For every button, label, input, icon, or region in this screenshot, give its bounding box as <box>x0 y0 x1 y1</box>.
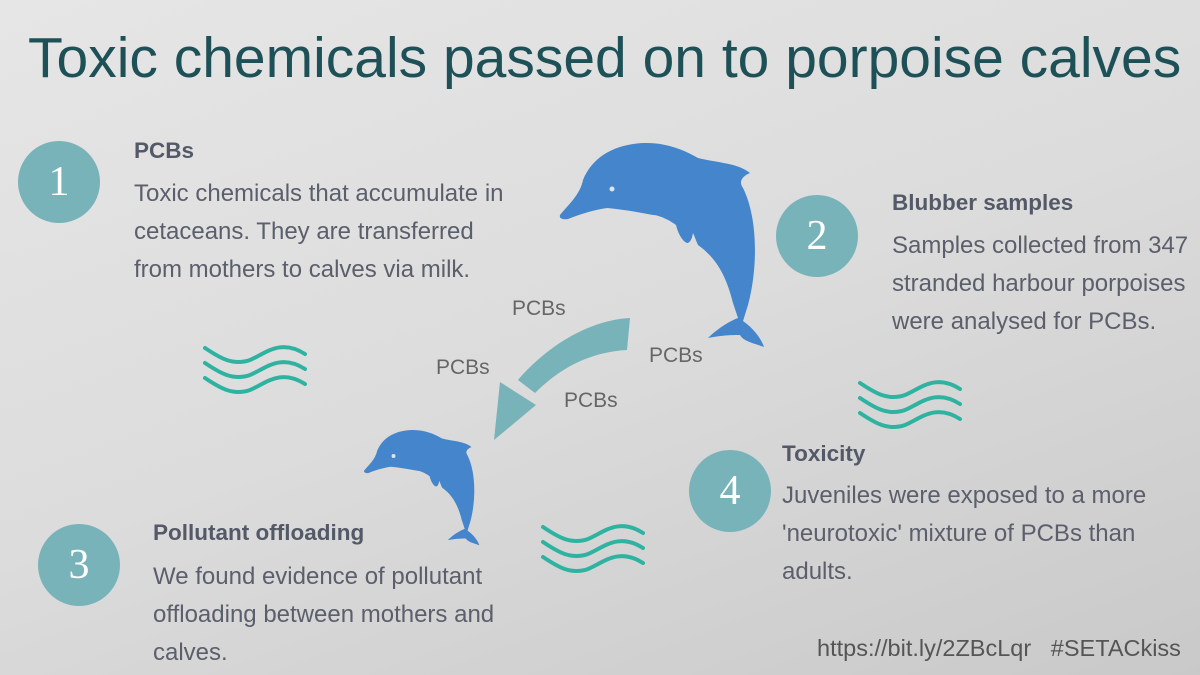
PCBs labels: PCBs <box>564 389 618 412</box>
circle 3 <box>38 524 120 606</box>
heading: Blubber samples: Blubber samples <box>892 190 1073 215</box>
text: toxicity: adults. <box>782 558 853 585</box>
circle 2 <box>776 195 858 277</box>
text: offloading <box>153 563 494 666</box>
circle 1 <box>18 141 100 223</box>
text: blubber: Samples collected from 347 <box>892 232 1188 259</box>
text: PCBs: from mothers to calves via milk. <box>134 256 470 283</box>
text: blubber <box>892 232 1188 335</box>
PCBs labels <box>436 297 703 412</box>
PCBs labels: PCBs <box>436 356 490 379</box>
text: toxicity <box>782 482 1146 585</box>
text: offloading: calves. <box>153 639 228 666</box>
footer links: https://bit.ly/2ZBcLqr #SETACkiss <box>817 635 1181 661</box>
arrow: curved transfer <box>494 318 630 440</box>
text: offloading: We found evidence of pollutant <box>153 563 482 590</box>
circle 2: 2 <box>806 213 828 259</box>
text: PCBs: Toxic chemicals that accumulate in <box>134 180 504 207</box>
text: PCBs <box>134 180 504 283</box>
heading: Pollutant offloading: Pollutant offloading <box>153 520 364 545</box>
text: PCBs: cetaceans. They are transferred <box>134 218 474 245</box>
PCBs labels: PCBs <box>512 297 566 320</box>
icon: waves right <box>860 382 960 427</box>
text: blubber: were analysed for PCBs. <box>892 308 1156 335</box>
icon: waves left <box>205 347 305 392</box>
heading: Toxicity: Toxicity <box>782 441 865 466</box>
icon: waves bottom <box>543 526 643 571</box>
circle 1: 1 <box>48 159 70 205</box>
text: offloading: offloading between mothers and <box>153 601 494 628</box>
circle 4: 4 <box>720 468 740 514</box>
circle 3: 3 <box>68 542 90 588</box>
title: Toxic chemicals passed on to porpoise calves <box>28 26 1181 90</box>
icon: mother dolphin <box>560 143 764 347</box>
heading: PCBs: PCBs <box>134 138 194 163</box>
text: toxicity: Juveniles were exposed to a more <box>782 482 1146 509</box>
icon: calf dolphin <box>364 430 479 545</box>
circle 4 <box>689 450 771 532</box>
text: blubber: stranded harbour porpoises <box>892 270 1186 297</box>
text: toxicity: 'neurotoxic' mixture of PCBs than <box>782 520 1135 547</box>
PCBs labels: PCBs <box>649 344 703 367</box>
